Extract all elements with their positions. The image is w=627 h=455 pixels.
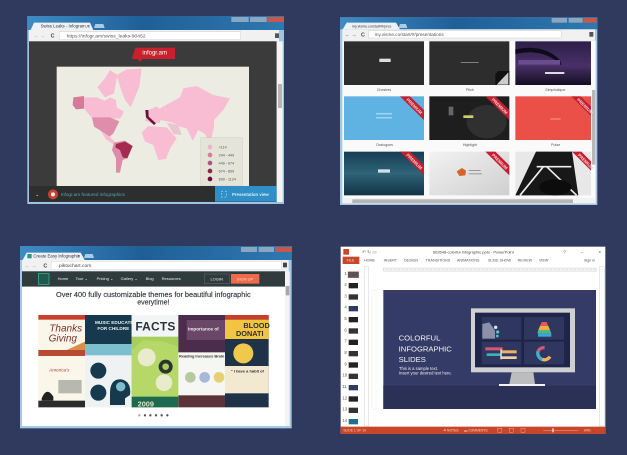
template: Simpholique: Simpholique <box>545 88 565 92</box>
bottom bar: ⌄ <box>35 192 39 197</box>
ribbon tabs: TRANSITIONS <box>426 259 451 263</box>
ribbon tabs: Sign in <box>584 259 595 263</box>
template: ocean <box>344 152 424 195</box>
window buttons <box>552 18 597 23</box>
premium labels: PREMIUM <box>491 97 509 115</box>
heading: Over 400 fully customizable themes for beautiful infographic <box>56 292 251 299</box>
slide thumbnails: 4 <box>344 305 347 310</box>
theme: music education: MUSIC EDUCATI <box>95 320 132 325</box>
ribbon tabs <box>343 257 595 264</box>
window: visme templates <box>340 17 597 205</box>
template: Simpholique <box>515 41 591 92</box>
template: tower <box>515 152 591 195</box>
panel scrollbars and side ruler <box>364 267 604 426</box>
template: Highlight: Highlight <box>463 143 477 147</box>
theme: facts: 2009 <box>138 400 154 409</box>
browser tab <box>343 23 407 29</box>
legend: 244 - 449 <box>219 154 234 158</box>
theme: blood donation: " I have a habit of <box>231 369 265 374</box>
slide thumbnails: 2 <box>344 282 347 287</box>
site navigation: Gallery ⌄ <box>121 276 138 281</box>
template: Pulse <box>515 96 591 147</box>
address bar: C <box>43 263 47 269</box>
title bar: – <box>581 250 584 255</box>
slide thumbnails <box>342 271 359 424</box>
brazil <box>115 142 133 158</box>
ribbon tabs: DESIGN <box>404 259 418 263</box>
browser tab <box>31 23 105 30</box>
carousel dots <box>138 414 168 416</box>
mini chart: pyramid <box>537 322 551 337</box>
infogram logo banner: infogr.am <box>142 50 167 56</box>
window buttons <box>241 247 292 252</box>
site navigation: Resources <box>162 276 181 281</box>
infogram logo banner <box>132 48 175 62</box>
premium labels: PREMIUM <box>405 153 424 171</box>
legend <box>201 138 242 186</box>
mini chart: donut <box>538 348 550 360</box>
premium labels: PREMIUM <box>405 97 424 115</box>
legend: 899 - 1124 <box>219 178 236 182</box>
united states <box>92 117 119 137</box>
ribbon tabs: HOME <box>364 259 376 263</box>
theme: thanksgiving: Giving <box>49 334 77 345</box>
theme: blood donation: DONATI <box>236 329 264 338</box>
address bar: my.visme.co/start/#/presentations <box>375 32 444 37</box>
theme: music education <box>85 315 132 407</box>
template: Pitch <box>429 41 509 92</box>
page background <box>342 41 596 203</box>
theme: burma: Importance of <box>188 327 219 332</box>
ribbon tabs: ANIMATIONS <box>457 259 480 263</box>
window: piktochart <box>20 246 292 428</box>
site navigation: LOGIN <box>210 276 223 281</box>
theme: facts: FACTS <box>135 320 175 334</box>
arctic canada <box>97 70 117 97</box>
template: Chesires: Chesires <box>377 88 391 92</box>
slide thumbnails: 5 <box>344 316 347 321</box>
top ruler <box>383 268 597 271</box>
address bar: ← → <box>345 32 357 38</box>
title bar: ↶ ↻ ▭ <box>362 250 377 255</box>
slide thumbnails: 13 <box>342 407 348 412</box>
slide subtitle: This is a sample text. <box>399 366 438 371</box>
slide thumbnails: 7 <box>344 339 347 344</box>
address bar: C <box>361 32 365 38</box>
slide title <box>399 334 452 364</box>
title bar: ? <box>563 250 566 255</box>
slide thumbnails: 14 <box>342 418 348 423</box>
slide subtitle <box>399 366 452 376</box>
south america <box>112 141 133 173</box>
slide title: COLORFUL <box>399 334 440 343</box>
window: powerpoint <box>341 247 605 434</box>
window: infogram map <box>27 16 284 204</box>
ribbon tabs: FILE <box>347 259 355 263</box>
site navigation: Home <box>58 276 69 281</box>
slide subtitle: Insert your desired text here. <box>399 371 452 376</box>
site navigation <box>22 271 285 287</box>
legend: 449 - 674 <box>219 162 234 166</box>
eurasia <box>160 86 230 143</box>
template: australia <box>429 152 509 195</box>
template: Chesires <box>344 41 424 92</box>
highlighted europe <box>145 110 156 125</box>
slide thumbnails: 6 <box>344 327 347 332</box>
bottom bar <box>29 186 277 202</box>
browser tab: Swiss Leaks - Infogram, c <box>41 24 91 29</box>
status bar <box>341 427 605 434</box>
theme: blood donation <box>225 315 270 407</box>
title bar: 662648-colorful-infographic.pptx - PowerPoint <box>433 250 515 255</box>
browser tab: my.visme.co/start/#/pres <box>352 24 392 28</box>
theme: music education: FOR CHILDRE <box>97 326 129 331</box>
template: Pitch: Pitch <box>466 88 474 92</box>
world map card <box>57 67 249 186</box>
address bar <box>29 30 279 41</box>
bottom bar: Presentation view <box>232 192 269 197</box>
template: Dralogues <box>344 96 424 147</box>
address bar: ← → <box>33 34 45 40</box>
middle east <box>167 123 182 135</box>
europe <box>145 107 162 123</box>
alaska <box>73 96 84 109</box>
theme: thanksgiving <box>38 315 85 407</box>
title bar: × <box>598 250 601 255</box>
premium labels: PREMIUM <box>577 153 595 171</box>
slide thumbnails: 9 <box>344 361 347 366</box>
heading: everytime! <box>137 300 169 307</box>
slide thumbnails: 12 <box>342 395 348 400</box>
north america <box>84 97 124 119</box>
slide thumbnails: 8 <box>344 350 347 355</box>
address bar: ← → <box>25 263 37 269</box>
theme: thanksgiving: America's <box>48 368 70 373</box>
legend: <114 <box>219 146 227 150</box>
premium labels <box>405 97 595 171</box>
window buttons <box>231 17 284 22</box>
template: Dralogues: Dralogues <box>376 143 393 147</box>
dark page background <box>29 41 277 202</box>
address bar <box>22 260 289 271</box>
premium labels: PREMIUM <box>491 153 509 171</box>
slide thumbnails: 3 <box>344 293 347 298</box>
slide title: INFOGRAPHIC <box>399 344 452 353</box>
theme: facts <box>132 315 178 409</box>
mini chart: bubbles <box>482 322 499 339</box>
theme: burma: Reading Increases Brain <box>179 353 225 358</box>
site navigation: Pricing ⌄ <box>97 276 113 281</box>
browser tab: Create Easy Infographic <box>33 254 81 259</box>
address bar <box>342 29 595 41</box>
slide thumbnails: 1 <box>344 271 347 276</box>
theme: blood donation: BLOOD <box>243 321 270 330</box>
status bar: SLIDE 1 OF 14 <box>343 429 366 433</box>
mini chart: arrows <box>485 347 517 359</box>
slide title: SLIDES <box>399 355 426 364</box>
page background <box>22 287 285 426</box>
template: Pulse: Pulse <box>551 143 560 147</box>
australia <box>201 148 217 160</box>
template: Highlight <box>429 96 509 147</box>
greenland <box>117 69 142 107</box>
browser tab: × <box>87 24 90 29</box>
central america <box>101 131 117 145</box>
status bar: ▬ COMMENTS <box>464 429 488 433</box>
browser tab: × <box>78 254 81 259</box>
site navigation: Blog <box>146 276 154 281</box>
premium labels: PREMIUM <box>576 97 594 115</box>
ribbon tabs: INSERT <box>384 259 398 263</box>
legend: 674 - 899 <box>219 170 234 174</box>
theme: burma <box>178 315 225 407</box>
browser tab <box>23 253 94 260</box>
ribbon tabs: REVIEW <box>518 259 533 263</box>
slide thumbnails: 11 <box>342 384 347 389</box>
slide <box>383 290 596 409</box>
africa <box>142 126 177 160</box>
status bar: 94% <box>584 429 591 433</box>
theme: thanksgiving: Thanks <box>49 324 82 335</box>
ribbon tabs: VIEW <box>539 259 549 263</box>
address bar: piktochart.com <box>59 263 91 269</box>
address bar: C <box>51 34 55 40</box>
title bar <box>343 249 601 255</box>
ribbon tabs: SLIDE SHOW <box>488 259 512 263</box>
address bar: https://infogr.am/swiss_leaks-90452 <box>67 34 146 40</box>
status bar: ≜ NOTES <box>443 429 459 433</box>
monitor <box>471 308 575 386</box>
heading <box>56 292 251 307</box>
horizontal scrollbar <box>342 198 596 203</box>
slide thumbnails: 10 <box>342 373 348 378</box>
site navigation: SIGN UP <box>237 276 254 281</box>
site navigation: Tour ⌄ <box>76 276 88 281</box>
premium ribbons <box>400 96 591 175</box>
bottom bar: Infogr.am featured infographics <box>61 192 126 197</box>
